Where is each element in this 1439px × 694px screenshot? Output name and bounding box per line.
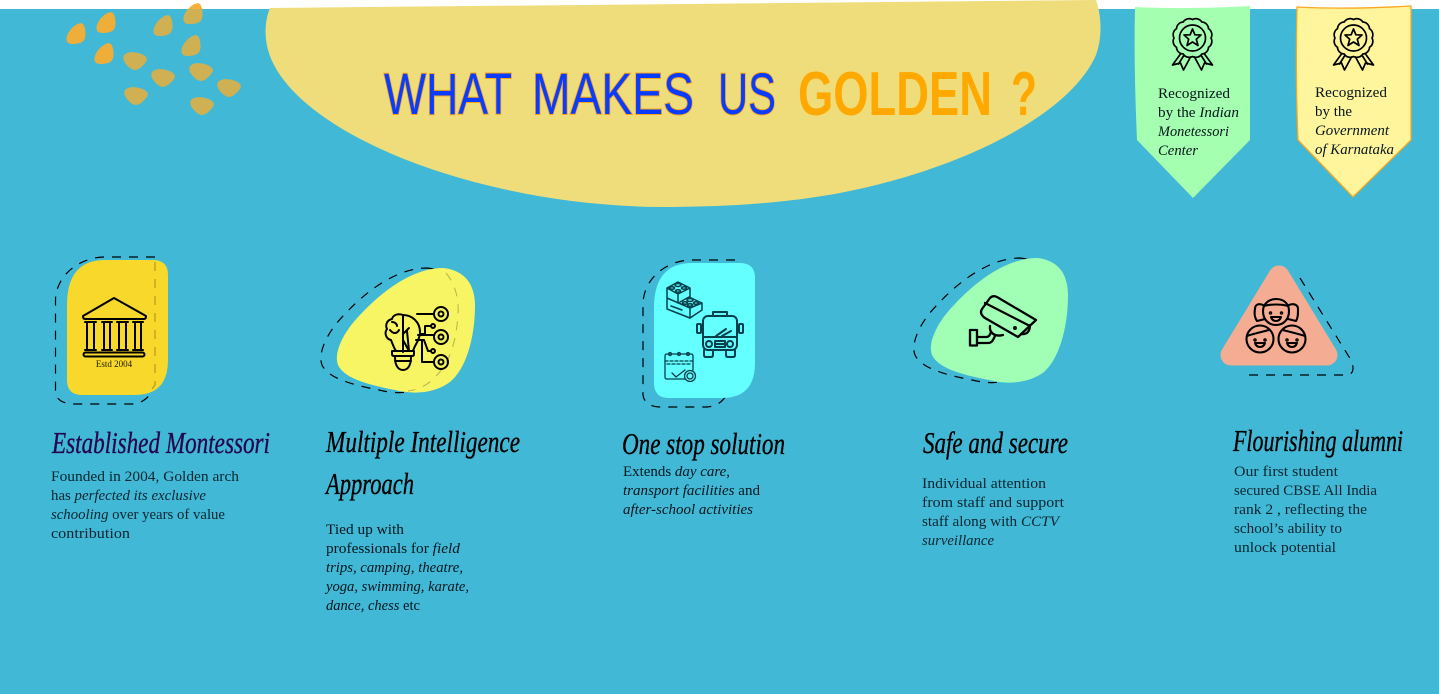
heading: One stop solution (622, 426, 785, 461)
heading (325, 424, 520, 501)
description: yoga, swimming, karate, (324, 579, 469, 595)
panel: flourishing alumni icon (1231, 276, 1353, 375)
badge text yellow (1315, 85, 1394, 158)
heading: Established Montessori (51, 425, 270, 460)
description: dance, chess etc (326, 598, 420, 614)
description (922, 476, 1064, 549)
column: multiple intelligence (324, 424, 520, 614)
description (623, 464, 761, 518)
badge text green: Monetessori (1157, 124, 1229, 140)
description: secured CBSE All India (1234, 483, 1378, 499)
panel: multiple intelligence icon (321, 268, 475, 393)
badge text green: Recognized (1158, 86, 1231, 102)
estd label: Estd 2004 (96, 359, 133, 369)
description (1234, 464, 1378, 556)
panel: safe and secure icon (914, 258, 1068, 383)
icon: medal green badge (1172, 19, 1212, 70)
description: schooling over years of value (51, 507, 225, 523)
icon: children faces (1246, 299, 1306, 352)
title: GOLDEN (798, 60, 992, 129)
column: flourishing alumni (1232, 423, 1403, 556)
icon: cctv camera (970, 296, 1036, 346)
badge shape yellow (1296, 6, 1411, 197)
icon: bus (697, 312, 743, 357)
icon: temple (83, 298, 146, 356)
badge text green (1157, 86, 1239, 159)
description: school’s ability to (1234, 521, 1342, 537)
icon: brain bulb circuit (386, 307, 448, 370)
column: one stop solution (622, 426, 785, 518)
badge text yellow: Government (1315, 123, 1390, 139)
decorative seed cluster (66, 3, 241, 115)
badge: Government of Karnataka (1296, 6, 1411, 197)
icon: medal yellow badge (1334, 19, 1374, 70)
title (384, 60, 1037, 129)
description: has perfected its exclusive (51, 488, 207, 504)
title: US (718, 62, 776, 127)
description: trips, camping, theatre, (326, 560, 463, 576)
panel: one stop solution icon (643, 260, 755, 407)
description (51, 469, 240, 542)
badge text yellow: by the (1315, 104, 1352, 120)
description: Tied up with (326, 522, 405, 538)
title banner shape (266, 0, 1100, 207)
description: Our first student (1234, 464, 1338, 480)
description (324, 522, 469, 614)
description: Extends day care, (623, 464, 730, 480)
panel: established montessori icon (56, 257, 168, 404)
badge text green: by the Indian (1158, 105, 1239, 121)
description: unlock potential (1234, 540, 1336, 556)
column: established montessori (51, 425, 270, 542)
badge text green: Center (1158, 143, 1198, 159)
description: rank 2 , reflecting the (1234, 502, 1367, 518)
badge shape green (1135, 6, 1250, 198)
heading: Multiple Intelligence (325, 424, 520, 459)
description: from staff and support (922, 495, 1064, 511)
description: after-school activities (623, 502, 753, 518)
title: ? (1011, 60, 1037, 129)
heading: Safe and secure (923, 425, 1068, 460)
description: Founded in 2004, Golden arch (51, 469, 240, 485)
badge text yellow: of Karnataka (1315, 142, 1394, 158)
description: surveillance (922, 533, 995, 549)
heading: Approach (325, 466, 414, 501)
column: safe and secure (922, 425, 1068, 549)
description: staff along with CCTV (922, 514, 1061, 530)
title: MAKES (532, 62, 694, 127)
description: transport facilities and (623, 483, 761, 499)
title: WHAT (384, 62, 512, 127)
description: Individual attention (922, 476, 1047, 492)
badge text yellow: Recognized (1315, 85, 1388, 101)
badge: Indian Montessori Center (1135, 6, 1250, 198)
icon: building blocks (667, 282, 702, 318)
description: professionals for field (326, 541, 461, 557)
icon: calendar (665, 352, 696, 382)
description: contribution (51, 526, 131, 542)
